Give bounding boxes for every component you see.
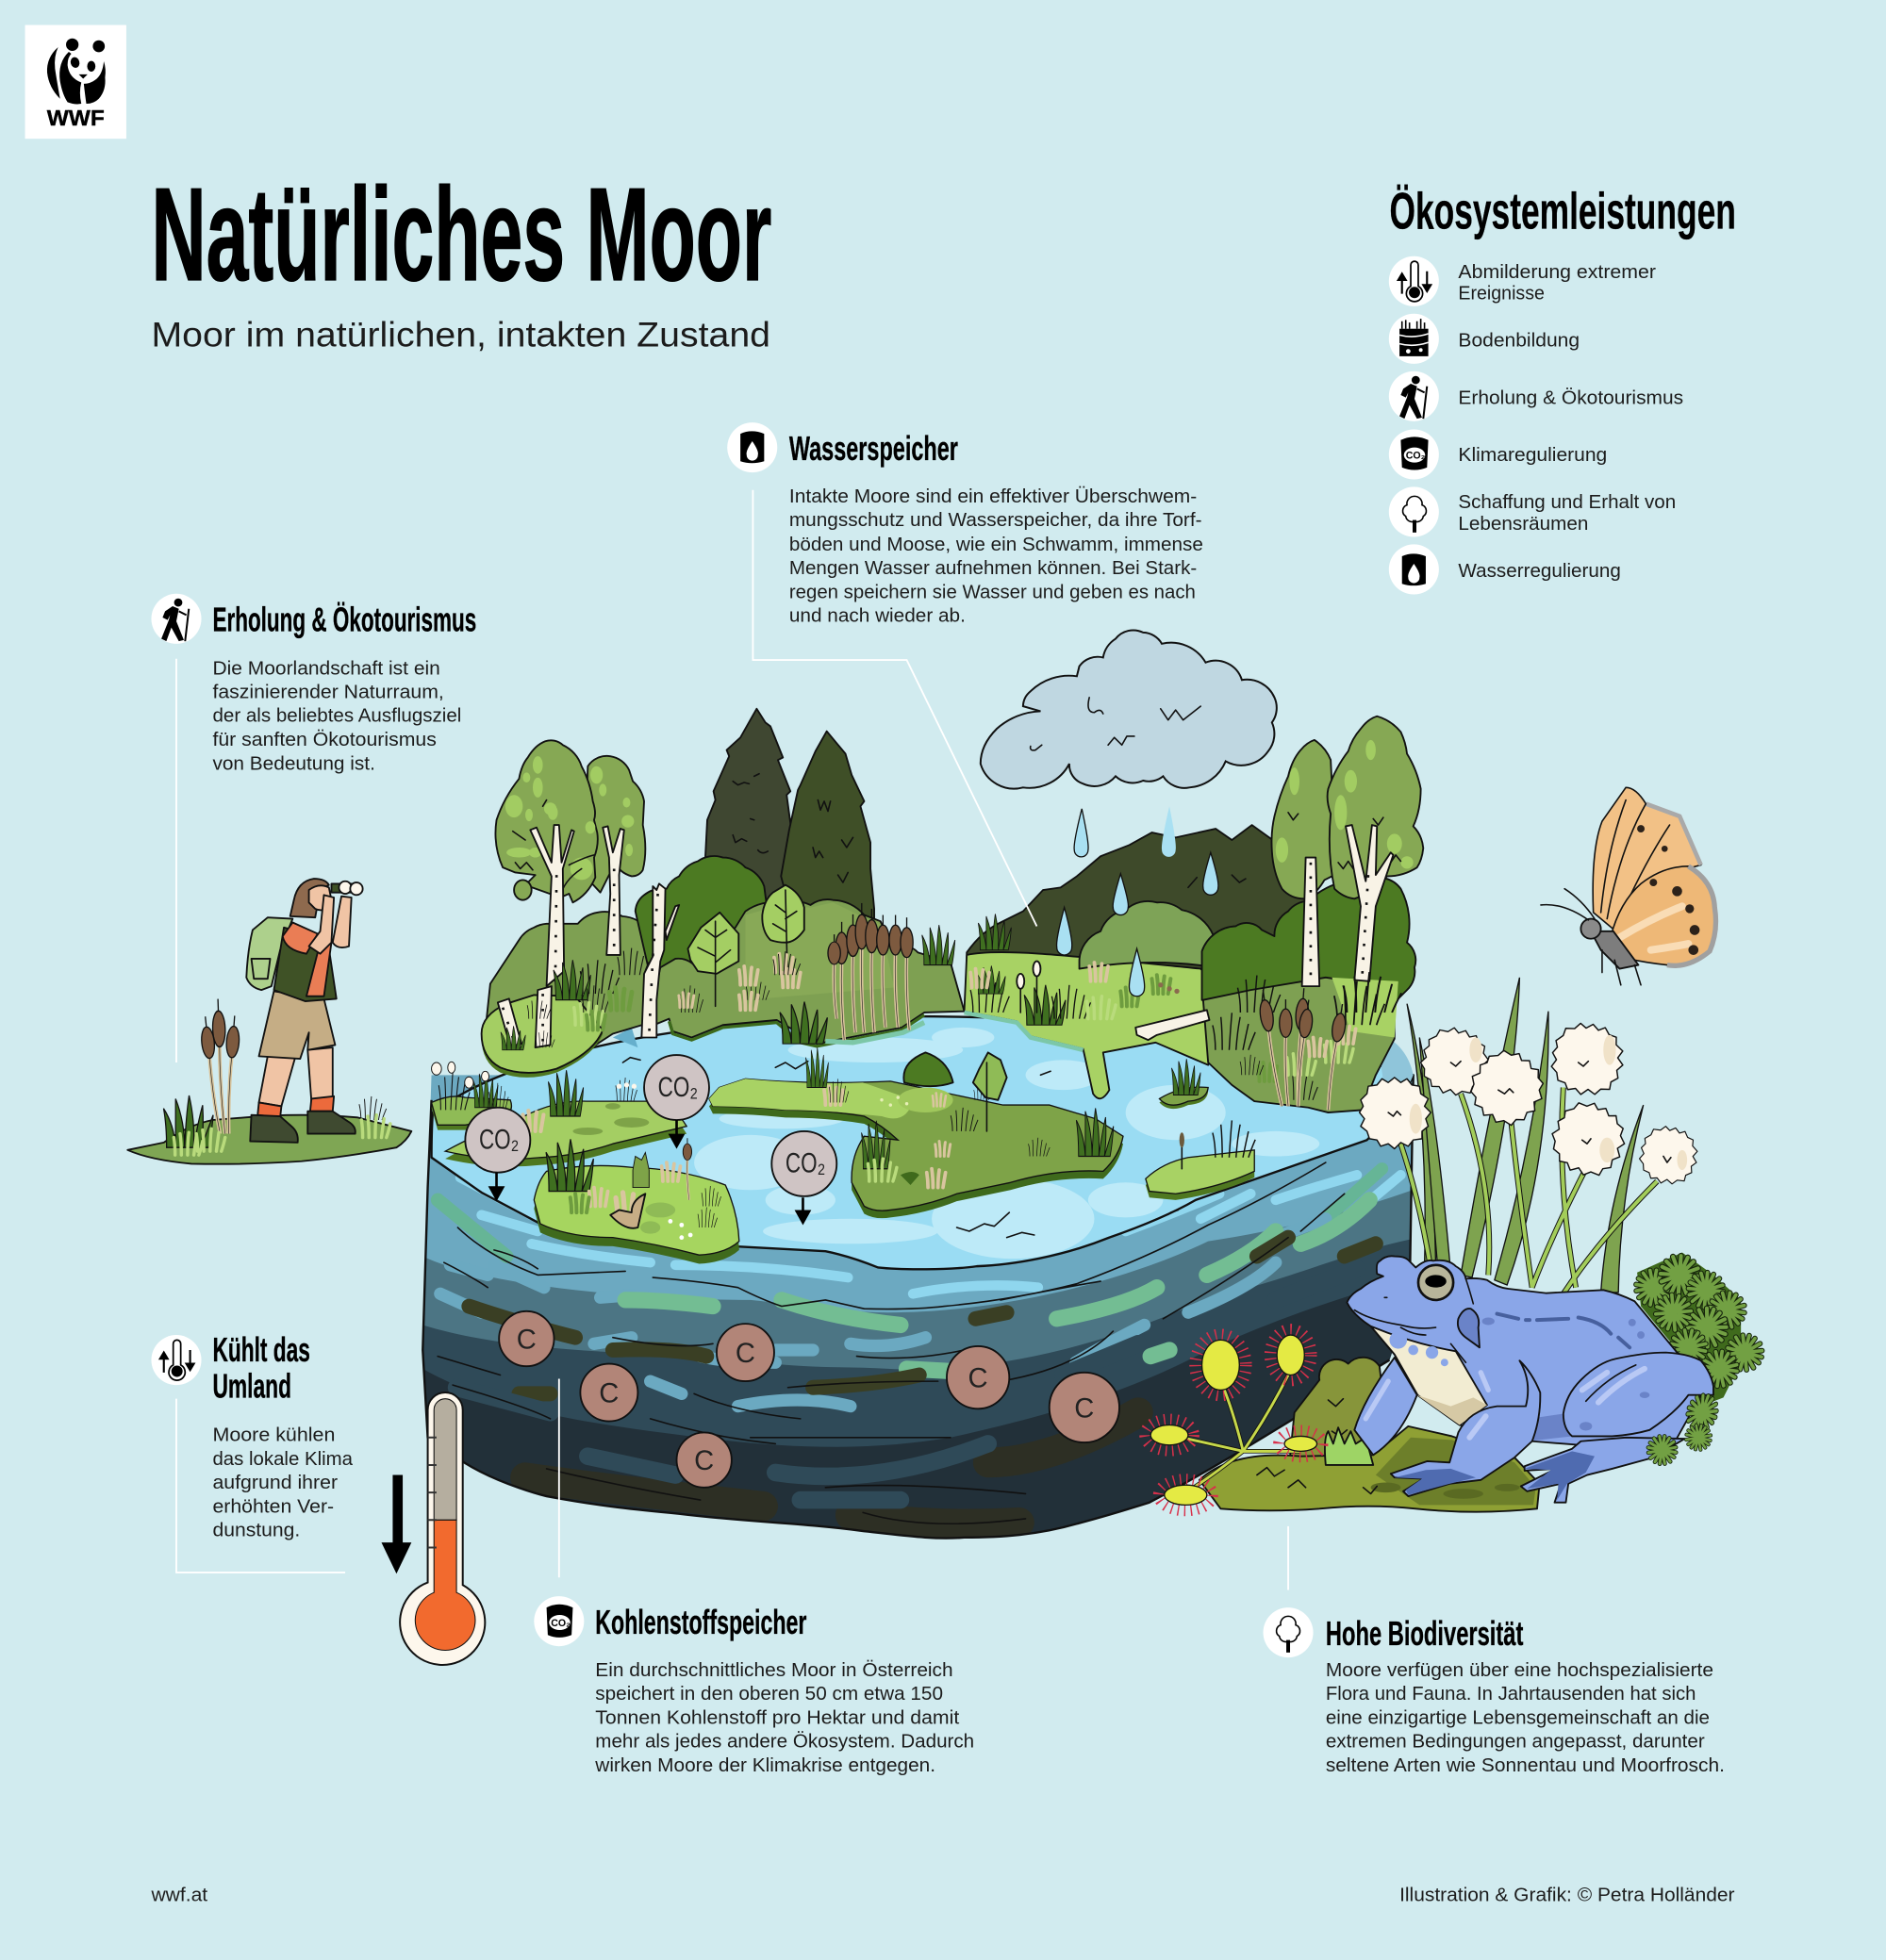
island: right xyxy=(1146,1120,1255,1200)
legend item: Klimaregulierung: CO₂ xyxy=(1406,451,1426,462)
frog xyxy=(1347,1256,1713,1503)
icon: hiker xyxy=(151,594,202,644)
water drops xyxy=(1057,806,1218,996)
panel: peat body cross-section xyxy=(413,1062,1426,1562)
text block: eine einzigartige Lebensgemeinschaft an die xyxy=(1326,1706,1710,1728)
cattails middle xyxy=(828,903,913,1040)
title: Natürliches Moor xyxy=(151,160,771,308)
text block: regen speichern sie Wasser und geben es nach xyxy=(789,581,1196,602)
CO2 bubble 2 xyxy=(644,1055,709,1146)
island: long left xyxy=(445,1070,687,1166)
right bush light xyxy=(1080,901,1222,969)
callout: Erholung und Ökotourismus xyxy=(151,594,476,775)
hind thigh xyxy=(1563,1353,1713,1436)
left island xyxy=(482,998,603,1078)
text block: seltene Arten wie Sonnentau und Moorfrosch. xyxy=(1326,1754,1725,1776)
text block: faszinierender Naturraum, xyxy=(212,682,444,703)
icon: water store xyxy=(727,422,777,472)
callout: Wasserspeicher xyxy=(727,422,1203,627)
leader lines xyxy=(176,490,1288,1590)
icon: tree xyxy=(1264,1607,1314,1657)
carbon circles: C xyxy=(1074,1394,1094,1425)
text block: dunstung. xyxy=(212,1520,300,1541)
text block: mungsschutz und Wasserspeicher, da ihre Torf- xyxy=(789,509,1202,531)
peat contour lines xyxy=(438,1162,1345,1524)
callout: Kühlt das Umland xyxy=(151,1331,353,1541)
text block: wirken Moore der Klimakrise entgegen. xyxy=(594,1754,935,1776)
text block xyxy=(212,1425,353,1541)
carbon circles: C xyxy=(599,1379,619,1409)
island: lower left xyxy=(534,1138,739,1263)
hiker figure xyxy=(246,879,363,1143)
carbon circles: C xyxy=(694,1446,714,1476)
CO2 bubbles with arrows xyxy=(465,1055,836,1223)
legend item: Abmilderung extremer Ereignisse: Ereignisse xyxy=(1458,283,1545,305)
logo: WWF panda xyxy=(25,25,126,139)
carbon circles: C xyxy=(968,1364,988,1394)
text block: erhöhten Ver- xyxy=(212,1495,334,1517)
island: large centre xyxy=(709,1047,1123,1218)
CO2 bubble 3: CO₂ xyxy=(786,1149,825,1179)
text block: Moore verfügen über eine hochspezialisierte xyxy=(1326,1659,1713,1681)
small light trees xyxy=(687,885,804,1006)
heading: Wasserspeicher xyxy=(789,430,958,468)
sundew plant xyxy=(1147,1331,1321,1508)
heading: Kohlenstoffspeicher xyxy=(595,1604,806,1641)
eardrum xyxy=(1458,1309,1480,1347)
text block: böden und Moose, wie ein Schwamm, immense xyxy=(789,534,1203,555)
hind foot xyxy=(1521,1438,1684,1503)
text block: speichert in den oberen 50 cm etwa 150 xyxy=(595,1683,943,1705)
text block: extremen Bedingungen angepasst, darunter xyxy=(1326,1731,1705,1753)
legend item: Klimaregulierung: Klimaregulierung xyxy=(1458,444,1607,466)
text block: mehr als jedes andere Ökosystem. Dadurch xyxy=(595,1731,974,1753)
small moss over frog xyxy=(1646,1392,1721,1466)
hiker scene xyxy=(127,879,411,1164)
callout: Kohlenstoffspeicher xyxy=(534,1596,974,1776)
legend item: Schaffung und Erhalt von Lebensräumen xyxy=(1389,486,1676,536)
legend item: Wasserregulierung xyxy=(1389,544,1621,594)
CO2 bubble 1 xyxy=(465,1108,530,1199)
eye xyxy=(1418,1265,1453,1300)
panel: Ökosystemleistungen legend xyxy=(1389,183,1736,594)
trees right xyxy=(1271,716,1423,986)
text block xyxy=(212,657,461,775)
birch stumps xyxy=(498,883,679,1047)
middle land xyxy=(648,899,965,1044)
heading: Erholung & Ökotourismus xyxy=(212,601,476,639)
text block: das lokale Klima xyxy=(212,1448,353,1470)
callout: Hohe Biodiversität xyxy=(1264,1607,1725,1776)
moss cushion xyxy=(1633,1249,1766,1407)
right land xyxy=(965,952,1232,1098)
heading: Kühlt das xyxy=(212,1331,310,1369)
text block: Moore kühlen xyxy=(212,1425,335,1446)
heading: Umland xyxy=(212,1367,291,1405)
CO2 bubble 2: CO₂ xyxy=(658,1073,698,1103)
body outline xyxy=(422,1075,1414,1539)
CO2 bubble 1: CO₂ xyxy=(479,1125,519,1155)
ground xyxy=(127,1115,411,1164)
thermometer xyxy=(400,1392,485,1665)
text block xyxy=(1326,1659,1725,1776)
legend item: Erholung und Ökotourismus xyxy=(1389,371,1683,421)
panel: water surface xyxy=(432,1016,1414,1269)
back stripes and mouth xyxy=(1354,1278,1473,1362)
front leg xyxy=(1391,1360,1540,1496)
legend item: Erholung und Ökotourismus: Erholung & Ökotourismus xyxy=(1458,387,1683,408)
right land mass xyxy=(1203,978,1395,1112)
belly xyxy=(1371,1326,1487,1425)
legend item: Schaffung und Erhalt von Lebensräumen: Lebensräumen xyxy=(1458,513,1588,535)
legend item: Abmilderung extremer Ereignisse: Abmilderung extremer xyxy=(1458,261,1656,283)
stems xyxy=(1400,1088,1657,1293)
island: small tuft xyxy=(1159,1059,1208,1109)
cattails right xyxy=(1257,988,1348,1111)
islands xyxy=(432,1047,1255,1263)
icon: carbon store: CO₂ xyxy=(551,1618,571,1629)
far front leg xyxy=(1354,1358,1417,1455)
text block: der als beliebtes Ausflugsziel xyxy=(212,705,461,727)
island: tuft left xyxy=(432,1062,511,1130)
icon: carbon store xyxy=(534,1596,584,1646)
footer: website: wwf.at xyxy=(150,1885,207,1906)
text block: von Bedeutung ist. xyxy=(212,753,375,775)
carbon circles: C xyxy=(736,1339,755,1369)
text block: Ein durchschnittliches Moor in Österreich xyxy=(595,1659,953,1681)
tree: left birch xyxy=(495,740,645,986)
butterfly xyxy=(1541,787,1715,985)
icon: thermometer with arrows xyxy=(151,1335,202,1385)
white sedges and fallen birch xyxy=(1017,962,1209,1040)
dark forest behind: spruces and hill xyxy=(705,709,1308,987)
footer: credit: Illustration & Grafik: © Petra Holländer xyxy=(1399,1885,1735,1906)
text block: Intakte Moore sind ein effektiver Überschwem- xyxy=(789,486,1197,507)
text block: Tonnen Kohlenstoff pro Hektar und damit xyxy=(595,1706,959,1728)
text block: Mengen Wasser aufnehmen können. Bei Stark- xyxy=(789,557,1197,579)
legend item: Bodenbildung: Bodenbildung xyxy=(1458,329,1580,351)
text block: Flora und Fauna. In Jahrtausenden hat sich xyxy=(1326,1683,1696,1705)
logo: WWF panda: WWF xyxy=(47,106,105,130)
dark bush xyxy=(636,856,767,987)
heading: Hohe Biodiversität xyxy=(1326,1615,1523,1653)
text block xyxy=(594,1659,974,1776)
legend item: Bodenbildung xyxy=(1389,314,1580,364)
text block: Die Moorlandschaft ist ein xyxy=(212,657,440,679)
text block: aufgrund ihrer xyxy=(212,1472,338,1493)
cattails xyxy=(199,998,240,1135)
grass tufts back xyxy=(501,914,1384,1100)
carbon circles: C xyxy=(517,1326,537,1356)
left bushes xyxy=(486,912,663,1050)
legend item: Wasserregulierung: Wasserregulierung xyxy=(1458,560,1621,582)
subtitle: Moor im natürlichen, intakten Zustand xyxy=(151,314,770,354)
legend item: Schaffung und Erhalt von Lebensräumen: Schaffung und Erhalt von xyxy=(1458,491,1676,513)
grass xyxy=(163,1095,390,1155)
carbon circles xyxy=(499,1311,1119,1488)
heading xyxy=(212,1331,310,1405)
arrow: temperature down xyxy=(382,1475,411,1573)
legend item: Abmilderung extremer Ereignisse xyxy=(1389,256,1656,306)
blades xyxy=(1407,978,1644,1293)
cottongrass xyxy=(1360,978,1704,1293)
text block: für sanften Ökotourismus xyxy=(212,729,437,750)
moss ground and sphagnum xyxy=(1199,1358,1540,1512)
belly shade xyxy=(1527,1414,1572,1441)
text block xyxy=(789,486,1203,627)
cotton heads xyxy=(1360,1018,1704,1191)
peat colour bands xyxy=(438,1131,1400,1524)
body xyxy=(1347,1256,1706,1447)
text block: und nach wieder ab. xyxy=(789,605,966,627)
right dark bush xyxy=(1202,878,1415,1013)
CO2 bubble 3 xyxy=(771,1131,836,1223)
cloud xyxy=(981,630,1277,789)
back land and trees xyxy=(482,716,1423,1112)
legend item: Klimaregulierung xyxy=(1389,429,1607,479)
